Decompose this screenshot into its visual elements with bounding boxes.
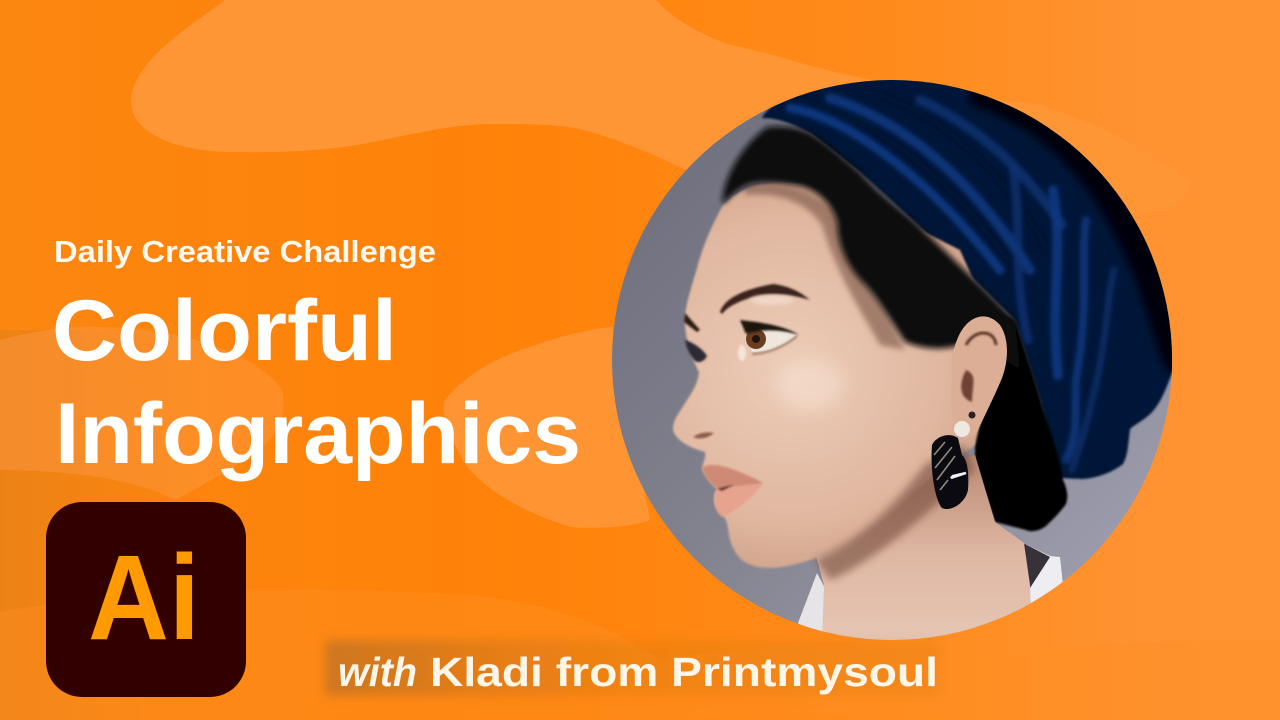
- back hair bun: [975, 300, 1067, 531]
- soft hairline fringe: [745, 184, 905, 350]
- brow highlight: [750, 295, 794, 305]
- black ribbed earring: [932, 435, 968, 509]
- pearl stud and dark stud: [954, 421, 970, 437]
- jaw shadow: [815, 445, 975, 580]
- white shirt collar: [798, 543, 1063, 640]
- darker left edge shade: [0, 330, 200, 720]
- subtitle: Daily Creative Challenge: [54, 234, 436, 269]
- title: Colorful: [52, 283, 397, 379]
- title: Infographics: [55, 386, 581, 482]
- ear: [951, 316, 1007, 438]
- navy turban: [761, 80, 1172, 480]
- title: [52, 283, 581, 482]
- portrait photo circle: [610, 60, 1200, 642]
- turban folds: [790, 95, 1114, 470]
- Adobe Illustrator logo: [46, 502, 246, 697]
- presenter caption: [325, 640, 940, 696]
- near eyebrow: [720, 284, 810, 314]
- far eyebrow: [684, 313, 700, 332]
- presenter caption: Kladi from Printmysoul: [430, 649, 938, 695]
- neck: [815, 455, 1032, 640]
- grey backdrop: [610, 78, 1174, 642]
- cheek highlight: [776, 359, 844, 411]
- presenter caption: with: [338, 649, 417, 695]
- far eye lashes: [685, 340, 707, 362]
- near eye: [740, 320, 799, 354]
- near black rim of turban: [966, 90, 1172, 378]
- front hair: [723, 126, 1020, 370]
- Adobe Illustrator logo: Ai: [88, 529, 200, 665]
- face: [673, 182, 1000, 568]
- nostril: [693, 432, 714, 438]
- tear-duct highlight: [738, 345, 746, 361]
- lips: [702, 465, 763, 517]
